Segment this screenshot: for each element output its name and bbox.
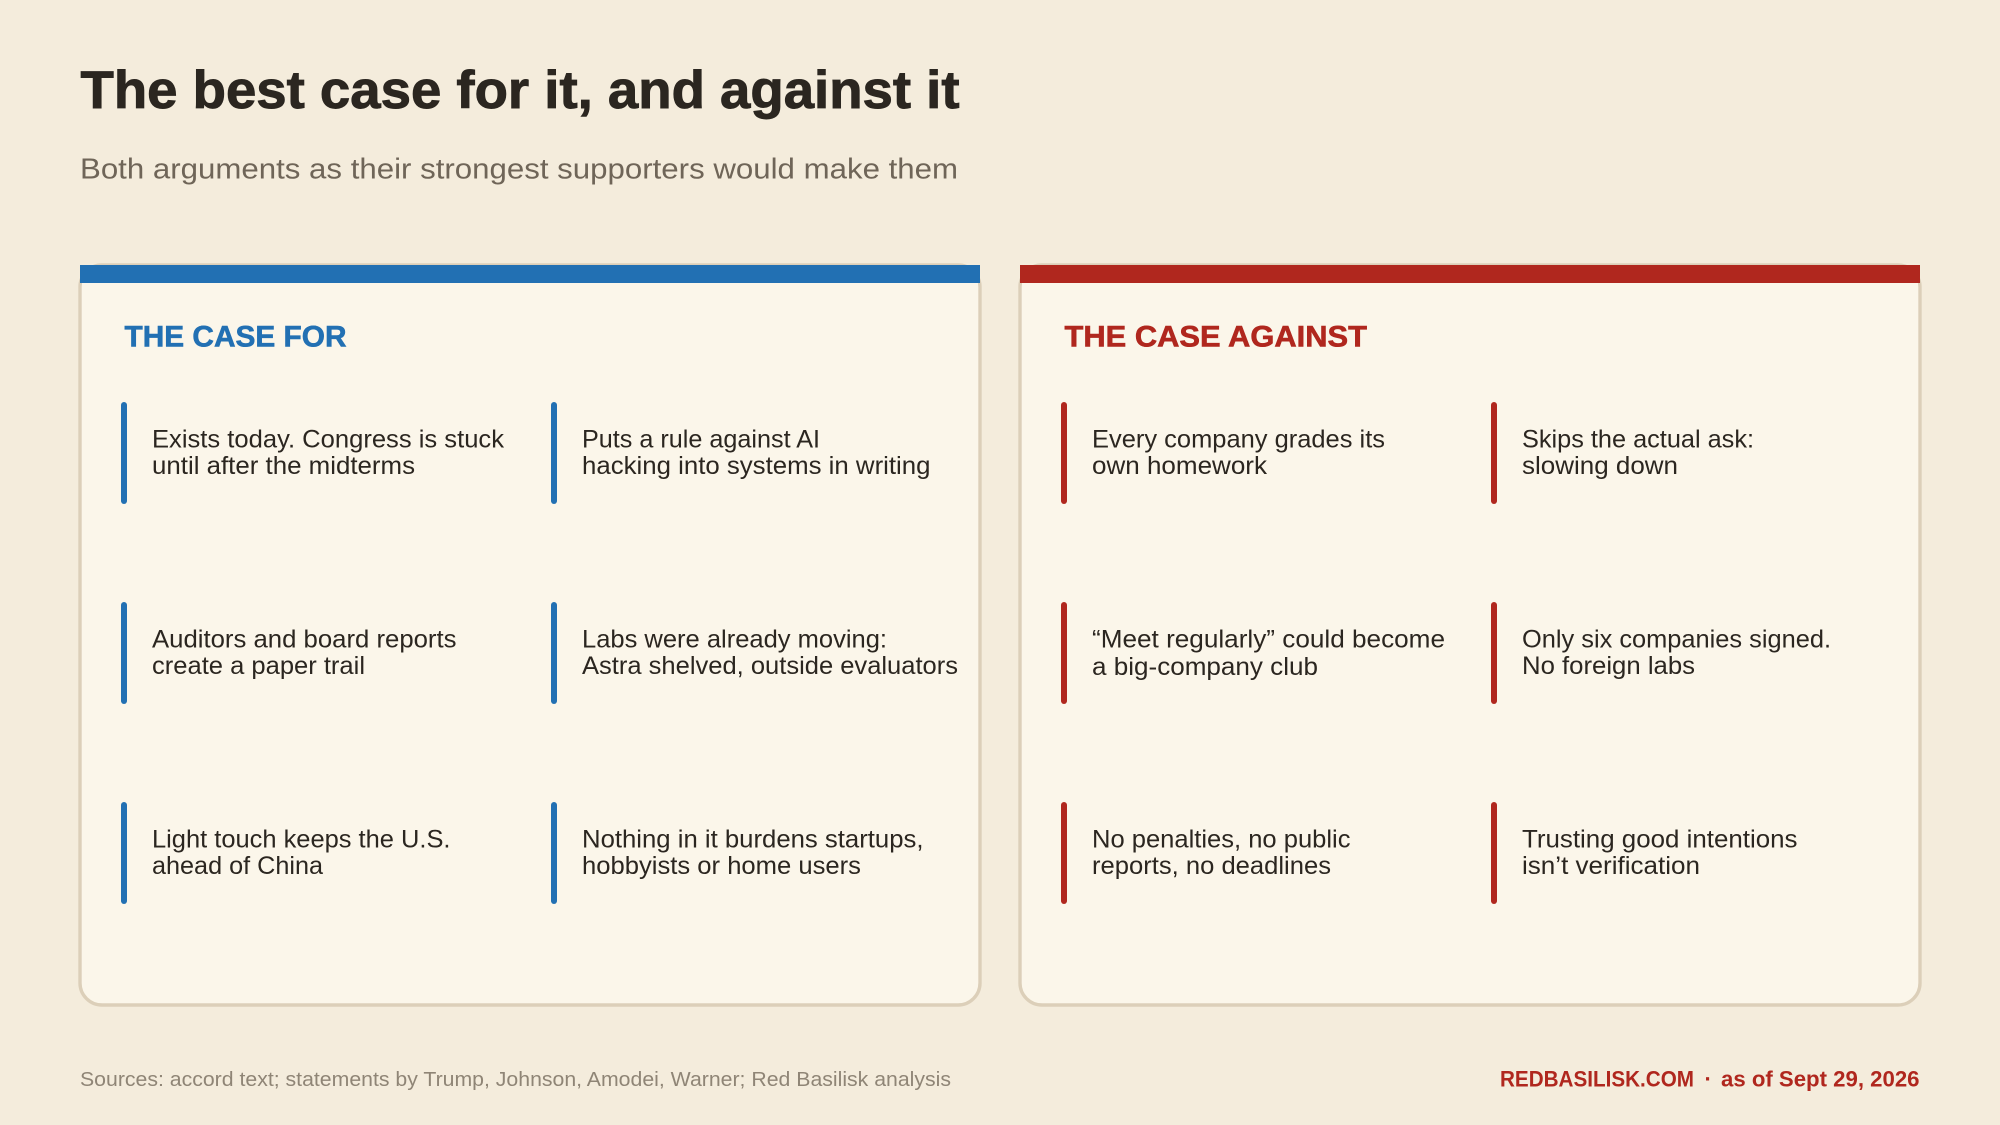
title: The best case for it, and against it xyxy=(80,61,959,120)
point: big-company club: “Meet regularly” could become xyxy=(1092,625,1445,653)
point: rule against AI hacking: Puts a rule against AI xyxy=(582,425,820,453)
point: rule against AI hacking: hacking into systems in writing xyxy=(582,452,930,480)
point: auditors: Auditors and board reports xyxy=(152,625,456,653)
panel: the case for xyxy=(80,265,980,1005)
panel top bar xyxy=(80,265,980,283)
point: auditors xyxy=(121,602,456,704)
point: no penalties: No penalties, no public xyxy=(1092,825,1350,853)
point: no startup burden xyxy=(551,802,924,904)
point: skips the ask: slowing down xyxy=(1522,452,1678,480)
point: skips the ask: Skips the actual ask: xyxy=(1522,425,1754,453)
panel background xyxy=(1020,265,1920,1005)
point: labs already moving: Labs were already moving: xyxy=(582,625,887,653)
point: labs already moving xyxy=(551,602,958,704)
point: grades own homework: Every company grades its xyxy=(1092,425,1385,453)
point: verification xyxy=(1491,802,1798,904)
panel top bar xyxy=(1020,265,1920,283)
point: light touch: ahead of China xyxy=(152,852,323,880)
point: auditors: create a paper trail xyxy=(152,652,365,680)
panel heading: THE CASE AGAINST xyxy=(1064,320,1367,354)
point: light touch: Light touch keeps the U.S. xyxy=(152,825,450,853)
point: only six companies: Only six companies signed. xyxy=(1522,625,1831,653)
point: no penalties: reports, no deadlines xyxy=(1092,852,1331,880)
point: only six companies xyxy=(1491,602,1831,704)
point: exists today: Exists today. Congress is stuck xyxy=(152,425,505,453)
brand and date: REDBASILISK.COM xyxy=(1500,1066,1694,1092)
point: big-company club: a big-company club xyxy=(1092,653,1318,681)
brand and date: as of Sept 29, 2026 xyxy=(1721,1066,1920,1092)
point: grades own homework xyxy=(1061,402,1385,504)
subtitle: Both arguments as their strongest supporters would make them xyxy=(80,154,958,186)
point: no penalties xyxy=(1061,802,1350,904)
point: verification: isn’t verification xyxy=(1522,852,1700,880)
sources footnote: Sources: accord text; statements by Trump, Johnson, Amodei, Warner; Red Basilisk analysis xyxy=(80,1069,951,1091)
point: verification: Trusting good intentions xyxy=(1522,825,1798,853)
panel background xyxy=(80,265,980,1005)
point: rule against AI hacking xyxy=(551,402,930,504)
point: skips the ask xyxy=(1491,402,1754,504)
point: no startup burden: Nothing in it burdens startups, xyxy=(582,825,924,853)
point: big-company club xyxy=(1061,602,1445,704)
brand and date: · xyxy=(1704,1066,1712,1092)
point: labs already moving: Astra shelved, outside evaluators xyxy=(582,652,958,680)
panel: the case against xyxy=(1020,265,1920,1005)
brand and date xyxy=(1500,1066,1920,1092)
point: light touch xyxy=(121,802,450,904)
point: exists today: until after the midterms xyxy=(152,452,415,480)
point: only six companies: No foreign labs xyxy=(1522,652,1695,680)
point: exists today xyxy=(121,402,505,504)
panel heading: THE CASE FOR xyxy=(124,320,347,354)
point: grades own homework: own homework xyxy=(1092,452,1268,480)
point: no startup burden: hobbyists or home users xyxy=(582,852,861,880)
